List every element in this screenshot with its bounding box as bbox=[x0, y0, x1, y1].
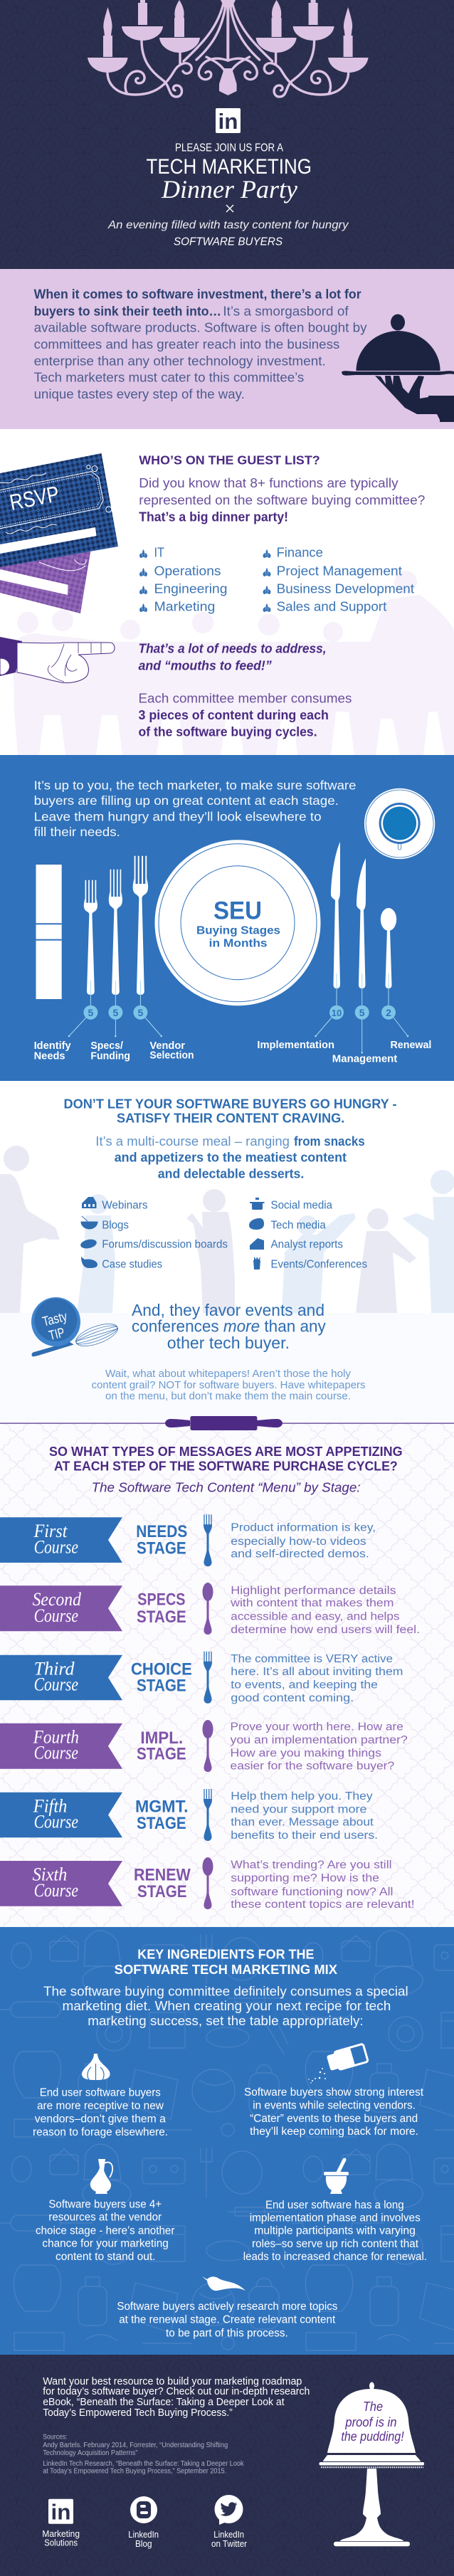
sources: Sources: bbox=[43, 2434, 68, 2442]
dome lettering: proof is in bbox=[344, 2415, 397, 2429]
panel: buying stages table setting bbox=[0, 755, 454, 1081]
sources: Andy Bartels. February 2014, Forrester, “Understanding Shifting bbox=[43, 2442, 228, 2449]
icon: mortar and pestle bbox=[324, 2160, 349, 2194]
ingredient: renewal research: to be part of this process. bbox=[166, 2327, 288, 2339]
panel: introduction bbox=[0, 269, 454, 429]
intro text: Leave them hungry and they’ll look elsewhere to bbox=[34, 809, 322, 823]
heading: SO WHAT TYPES OF MESSAGES ARE MOST APPETIZING bbox=[49, 1445, 403, 1459]
heading: SOFTWARE TECH MARKETING MIX bbox=[115, 1963, 337, 1977]
ingredient: resources: resources at the vendor bbox=[48, 2212, 162, 2224]
callout text bbox=[138, 642, 352, 739]
tip text: other tech buyer. bbox=[167, 1334, 290, 1352]
stage durations: 5 bbox=[138, 1007, 144, 1018]
intro text: When it comes to software investment, there’s a lot for bbox=[34, 287, 361, 301]
guest list text: Did you know that 8+ functions are typically bbox=[139, 476, 398, 490]
icon: Tasty Tip whisk bbox=[31, 1297, 120, 1357]
tip text: And, they favor events and bbox=[132, 1301, 324, 1319]
course: third: to events, and keeping the bbox=[231, 1679, 378, 1691]
subtitle bbox=[107, 219, 349, 248]
ingredient: resources: content to stand out. bbox=[56, 2251, 155, 2263]
ingredient: resources: choice stage - here’s another bbox=[36, 2224, 174, 2237]
icon: rolling pin divider bbox=[0, 1416, 454, 1430]
icon: crossed utensils bbox=[226, 205, 233, 212]
list of functions: Finance bbox=[277, 545, 323, 559]
stage labels: Vendor bbox=[149, 1040, 185, 1052]
social: LinkedIn marketing solutions bbox=[42, 2499, 80, 2548]
panel: header invitation bbox=[0, 0, 454, 269]
course: first: and self-directed demos. bbox=[231, 1548, 369, 1560]
social: LinkedIn blog: LinkedIn bbox=[128, 2529, 159, 2540]
course: third: here. It’s all about inviting them bbox=[231, 1666, 403, 1678]
ingredient: resources: chance for your marketing bbox=[42, 2238, 169, 2250]
guest list text: That’s a big dinner party! bbox=[139, 510, 288, 524]
course: third: CHOICE bbox=[131, 1659, 192, 1679]
whitepapers note: Wait, what about whitepapers! Aren’t those the holy bbox=[105, 1368, 352, 1380]
course: first: STAGE bbox=[137, 1538, 186, 1558]
icon: dinner plate with title: in Months bbox=[209, 938, 268, 950]
course: sixth: STAGE bbox=[137, 1882, 186, 1901]
subtitle: An evening filled with tasty content for hungry bbox=[107, 219, 349, 231]
course: sixth: RENEW bbox=[134, 1866, 191, 1885]
course: third bbox=[0, 1652, 403, 1704]
stage labels: Implementation bbox=[257, 1040, 334, 1051]
course: second: Second bbox=[33, 1589, 82, 1610]
description text: and delectable desserts. bbox=[158, 1167, 304, 1181]
intro text: fill their needs. bbox=[34, 825, 120, 839]
course: second: STAGE bbox=[137, 1608, 186, 1627]
stage durations: 5 bbox=[113, 1007, 119, 1018]
stage durations bbox=[68, 973, 408, 1054]
description text: It’s a multi-course meal – ranging bbox=[95, 1134, 290, 1149]
course: fifth: MGMT. bbox=[135, 1798, 188, 1817]
intro text: available software products. Software is often bought by bbox=[34, 321, 367, 335]
content types list bbox=[102, 1199, 367, 1271]
course: fifth: Help them help you. They bbox=[231, 1790, 373, 1802]
course: fourth: STAGE bbox=[137, 1745, 186, 1764]
stage labels: Needs bbox=[34, 1051, 65, 1062]
ingredient: resources: Software buyers use 4+ bbox=[48, 2198, 162, 2210]
panel: guest list bbox=[0, 429, 454, 755]
panel: content craving bbox=[0, 1081, 454, 1423]
ingredient: events bbox=[244, 2086, 424, 2138]
heading: The Software Tech Content “Menu” by Stage: bbox=[92, 1481, 361, 1495]
icon: pointing hand bbox=[0, 637, 115, 683]
icon: cloche on waiter's hand bbox=[342, 315, 454, 422]
description text: marketing diet. When creating your next recipe for tech bbox=[63, 1999, 391, 2013]
list of functions: Project Management bbox=[277, 564, 402, 578]
icon: Tasty Tip whisk: TIP bbox=[48, 1326, 66, 1344]
course: second: determine how end users will feel. bbox=[231, 1624, 420, 1636]
guest list text: represented on the software buying committee? bbox=[139, 493, 425, 507]
social: LinkedIn marketing solutions: Solutions bbox=[44, 2538, 78, 2548]
content types list: Social media bbox=[270, 1199, 332, 1211]
title: Dinner Party bbox=[161, 175, 297, 204]
callout text: 3 pieces of content during each bbox=[138, 708, 329, 722]
course: second bbox=[0, 1583, 420, 1636]
course: fifth bbox=[0, 1789, 378, 1842]
dome lettering bbox=[341, 2400, 404, 2444]
call to action text: eBook, “Beneath the Surface: Taking a Deeper Look at bbox=[43, 2396, 285, 2408]
blue card bbox=[0, 453, 118, 567]
course: sixth bbox=[0, 1857, 415, 1911]
course: fourth: easier for the software buyer? bbox=[231, 1761, 395, 1773]
social: LinkedIn blog: Blog bbox=[135, 2538, 152, 2549]
course: second: Highlight performance details bbox=[231, 1585, 396, 1597]
callout text: of the software buying cycles. bbox=[138, 724, 317, 739]
panel: content menu bbox=[0, 1416, 454, 1927]
course: sixth: Course bbox=[34, 1880, 78, 1901]
intro text: unique tastes every step of the way. bbox=[34, 387, 245, 401]
ingredient: implementation: multiple participants with varying bbox=[254, 2224, 416, 2237]
whitepapers note: on the menu, but don’t make them the main course. bbox=[105, 1391, 351, 1403]
list of functions bbox=[139, 545, 414, 613]
intro text: Tech marketers must cater to this committee’s bbox=[34, 371, 304, 385]
description text: and appetizers to the meatiest content bbox=[115, 1151, 347, 1165]
food icons bbox=[80, 1197, 264, 1269]
heading: WHO’S ON THE GUEST LIST? bbox=[139, 453, 320, 468]
course: fifth: Course bbox=[34, 1812, 78, 1832]
list of functions: IT bbox=[154, 545, 164, 559]
course: second: SPECS bbox=[137, 1590, 185, 1610]
icon: chili pepper bbox=[202, 2276, 246, 2291]
ingredient: implementation: implementation phase and involves bbox=[250, 2212, 421, 2224]
course: fifth: need your support more bbox=[231, 1804, 367, 1816]
stage durations: 5 bbox=[88, 1007, 94, 1018]
course: first: Course bbox=[34, 1536, 78, 1557]
icon: chandelier bbox=[88, 0, 369, 97]
intro text bbox=[34, 287, 367, 401]
ingredient: events: Software buyers show strong interest bbox=[244, 2086, 424, 2099]
intro text: buyers are filling up on great content at each stage. bbox=[34, 793, 339, 808]
ingredient: implementation: leads to increased chance for renewal. bbox=[243, 2251, 427, 2263]
ingredient: resources bbox=[36, 2198, 174, 2263]
course: sixth: supporting me? How is the bbox=[231, 1872, 379, 1884]
course: first bbox=[0, 1514, 376, 1566]
sources bbox=[43, 2434, 244, 2476]
icon: dinner plate with title: SEU bbox=[213, 897, 262, 925]
silhouette: blue guests bbox=[77, 1170, 454, 1313]
silhouette: lavender guests bbox=[0, 1146, 416, 1313]
tip text bbox=[132, 1301, 326, 1352]
ingredient: end user buyers: End user software buyers bbox=[40, 2087, 161, 2099]
course: fourth: you an implementation partner? bbox=[231, 1734, 408, 1746]
list of functions: Engineering bbox=[154, 581, 228, 596]
stage durations: 10 bbox=[332, 1008, 342, 1018]
course: second: accessible and easy, and helps bbox=[231, 1611, 400, 1623]
course: fourth: Course bbox=[34, 1743, 78, 1763]
icon: napkin bbox=[36, 865, 62, 999]
call to action text bbox=[43, 2375, 310, 2419]
sources: LinkedIn Tech Research, “Beneath the Surface: Taking a Deeper Look bbox=[43, 2460, 244, 2468]
list of functions: Operations bbox=[154, 564, 221, 578]
course: third: good content coming. bbox=[231, 1692, 354, 1704]
icon: oil jug bbox=[90, 2159, 112, 2194]
list of functions: Business Development bbox=[277, 581, 414, 596]
ingredient: renewal research: Software buyers actively research more topics bbox=[117, 2301, 338, 2313]
stage labels: Funding bbox=[90, 1051, 130, 1062]
icon: saucer and cup bbox=[364, 788, 435, 859]
panel: footer bbox=[0, 2355, 454, 2576]
heading: AT EACH STEP OF THE SOFTWARE PURCHASE CYCLE? bbox=[54, 1459, 398, 1474]
callout text: That’s a lot of needs to address, bbox=[138, 642, 327, 656]
tip text: conferences more than any bbox=[132, 1317, 326, 1336]
ingredient: events: “Cater” events to these buyers and bbox=[250, 2113, 418, 2125]
course: third: Course bbox=[34, 1674, 78, 1695]
ingredient: implementation: End user software has a long bbox=[265, 2199, 404, 2211]
course: first: First bbox=[33, 1521, 68, 1541]
stage labels: Selection bbox=[149, 1050, 194, 1062]
intro text: committees and has greater reach into the business bbox=[34, 337, 339, 352]
course: fifth: Fifth bbox=[33, 1795, 67, 1816]
course: first: NEEDS bbox=[136, 1522, 187, 1541]
ingredient: implementation bbox=[243, 2199, 427, 2263]
course: third: Third bbox=[34, 1658, 75, 1679]
description text: from snacks bbox=[294, 1134, 365, 1149]
purple card bbox=[0, 548, 91, 613]
whitepapers note bbox=[92, 1368, 366, 1403]
course: fifth: STAGE bbox=[137, 1814, 186, 1833]
icon: forks bbox=[84, 856, 148, 995]
ingredient: end user buyers: are more receptive to new bbox=[37, 2100, 164, 2112]
course: third: STAGE bbox=[137, 1677, 186, 1696]
ingredient: events: in events while selecting vendors. bbox=[253, 2099, 416, 2111]
course: sixth: Sixth bbox=[33, 1864, 67, 1885]
whitepapers note: content grail? NOT for software buyers. Have whitepapers bbox=[92, 1380, 366, 1391]
icon: knives and spoon bbox=[331, 842, 396, 988]
illustration: RSVP cards bbox=[0, 453, 118, 613]
call to action text: Want your best resource to build your marketing roadmap bbox=[43, 2375, 302, 2387]
content types list: Analyst reports bbox=[270, 1238, 343, 1250]
icon: dinner plate with title: Buying Stages bbox=[196, 924, 280, 936]
ingredient: end user buyers bbox=[33, 2087, 168, 2138]
description text bbox=[95, 1134, 365, 1181]
content types list: Tech media bbox=[270, 1220, 326, 1232]
course: sixth: What’s trending? Are you still bbox=[231, 1859, 391, 1872]
call to action text: for today’s software buyer? Check out our in-depth research bbox=[43, 2385, 310, 2397]
social: LinkedIn marketing solutions: in bbox=[51, 2499, 71, 2525]
heading bbox=[115, 1948, 337, 1977]
content types list: Blogs bbox=[102, 1220, 129, 1232]
stage durations: 2 bbox=[386, 1007, 391, 1018]
stage durations: 5 bbox=[359, 1007, 365, 1018]
content types list: Case studies bbox=[102, 1259, 162, 1271]
ingredient: renewal research bbox=[117, 2301, 338, 2339]
intro text: It’s a smorgasbord of bbox=[223, 304, 349, 318]
heading bbox=[64, 1097, 397, 1125]
course: fourth: How are you making things bbox=[231, 1747, 381, 1759]
content types list: Webinars bbox=[102, 1199, 148, 1211]
icon: LinkedIn logo: in bbox=[218, 109, 238, 134]
icon: cake stand with dome bbox=[319, 2382, 424, 2546]
title bbox=[147, 142, 312, 204]
guest list text bbox=[139, 476, 425, 524]
ingredient: renewal research: at the renewal stage. Create relevant content bbox=[119, 2313, 336, 2326]
stage labels: Renewal bbox=[390, 1040, 431, 1051]
ingredient: end user buyers: reason to forage elsewhere. bbox=[33, 2126, 168, 2138]
sources: Technology Acquisition Patterns” bbox=[43, 2449, 137, 2457]
callout text: Each committee member consumes bbox=[138, 691, 352, 705]
social: LinkedIn blog bbox=[128, 2496, 159, 2549]
description text: The software buying committee definitely consumes a special bbox=[43, 1984, 408, 1998]
course: fourth: IMPL. bbox=[140, 1728, 183, 1748]
icon: garlic bbox=[82, 2054, 110, 2080]
ingredient: implementation: roles–so serve up rich content that bbox=[252, 2238, 419, 2250]
heading bbox=[49, 1445, 403, 1495]
stage labels: Identify bbox=[34, 1040, 71, 1052]
course: fourth: Prove your worth here. How are bbox=[231, 1721, 403, 1733]
intro text: It’s up to you, the tech marketer, to make sure software bbox=[34, 778, 356, 792]
social: LinkedIn on Twitter: on Twitter bbox=[211, 2538, 248, 2549]
course: fifth: than ever. Message about bbox=[231, 1817, 374, 1829]
title: PLEASE JOIN US FOR A bbox=[175, 142, 284, 154]
course: third: The committee is VERY active bbox=[231, 1653, 393, 1665]
intro text bbox=[34, 778, 356, 839]
subtitle: SOFTWARE BUYERS bbox=[174, 236, 283, 248]
course: second: with content that makes them bbox=[230, 1598, 394, 1610]
stage labels: Management bbox=[332, 1054, 397, 1065]
heading: SATISFY THEIR CONTENT CRAVING. bbox=[117, 1111, 344, 1125]
heading: KEY INGREDIENTS FOR THE bbox=[137, 1948, 315, 1962]
icon: Tasty Tip whisk: Tasty bbox=[41, 1309, 69, 1330]
list of functions: Sales and Support bbox=[277, 599, 386, 613]
intro text: enterprise than any other technology investment. bbox=[34, 354, 326, 368]
list of functions: Marketing bbox=[154, 599, 215, 613]
content types list: Forums/discussion boards bbox=[102, 1238, 228, 1250]
dome lettering: the pudding! bbox=[341, 2429, 404, 2444]
intro text: buyers to sink their teeth into… bbox=[34, 304, 221, 318]
title: TECH MARKETING bbox=[147, 155, 312, 179]
icon: salt shaker bbox=[308, 2044, 368, 2084]
course: fourth: Fourth bbox=[33, 1726, 79, 1747]
content types list: Events/Conferences bbox=[270, 1259, 367, 1271]
description text bbox=[43, 1984, 408, 2028]
stage labels: Specs/ bbox=[90, 1040, 123, 1052]
callout text: and “mouths to feed!” bbox=[138, 659, 272, 673]
course: sixth: software functioning now? All bbox=[231, 1886, 393, 1898]
dome lettering: The bbox=[363, 2400, 383, 2414]
social: LinkedIn on Twitter: LinkedIn bbox=[213, 2529, 244, 2540]
course: fifth: benefits to their end users. bbox=[231, 1830, 378, 1842]
stage labels bbox=[34, 1040, 431, 1065]
ingredient: events: they’ll keep coming back for more. bbox=[250, 2126, 418, 2138]
course: first: especially how-to videos bbox=[231, 1536, 366, 1548]
silhouette: dinner guests bbox=[13, 571, 454, 755]
course: fourth bbox=[0, 1720, 408, 1773]
icon: dinner plate with title bbox=[155, 840, 320, 1005]
blue card: RSVP bbox=[8, 481, 61, 515]
social: LinkedIn marketing solutions: Marketing bbox=[42, 2528, 80, 2539]
sources: at Today’s Empowered Tech Buying Process,” September 2015. bbox=[43, 2468, 226, 2476]
heading: DON’T LET YOUR SOFTWARE BUYERS GO HUNGRY - bbox=[64, 1097, 397, 1111]
call to action text: Today’s Empowered Tech Buying Process.” bbox=[43, 2407, 233, 2419]
description text: marketing success, set the table appropriately: bbox=[88, 2014, 364, 2028]
course: sixth: these content topics are relevant! bbox=[231, 1899, 415, 1911]
course: first: Product information is key, bbox=[231, 1522, 376, 1534]
social: LinkedIn on Twitter bbox=[211, 2495, 248, 2549]
panel: key ingredients bbox=[0, 1927, 454, 2355]
ingredient: end user buyers: vendors–don’t give them a bbox=[35, 2113, 166, 2126]
course: second: Course bbox=[34, 1605, 78, 1626]
